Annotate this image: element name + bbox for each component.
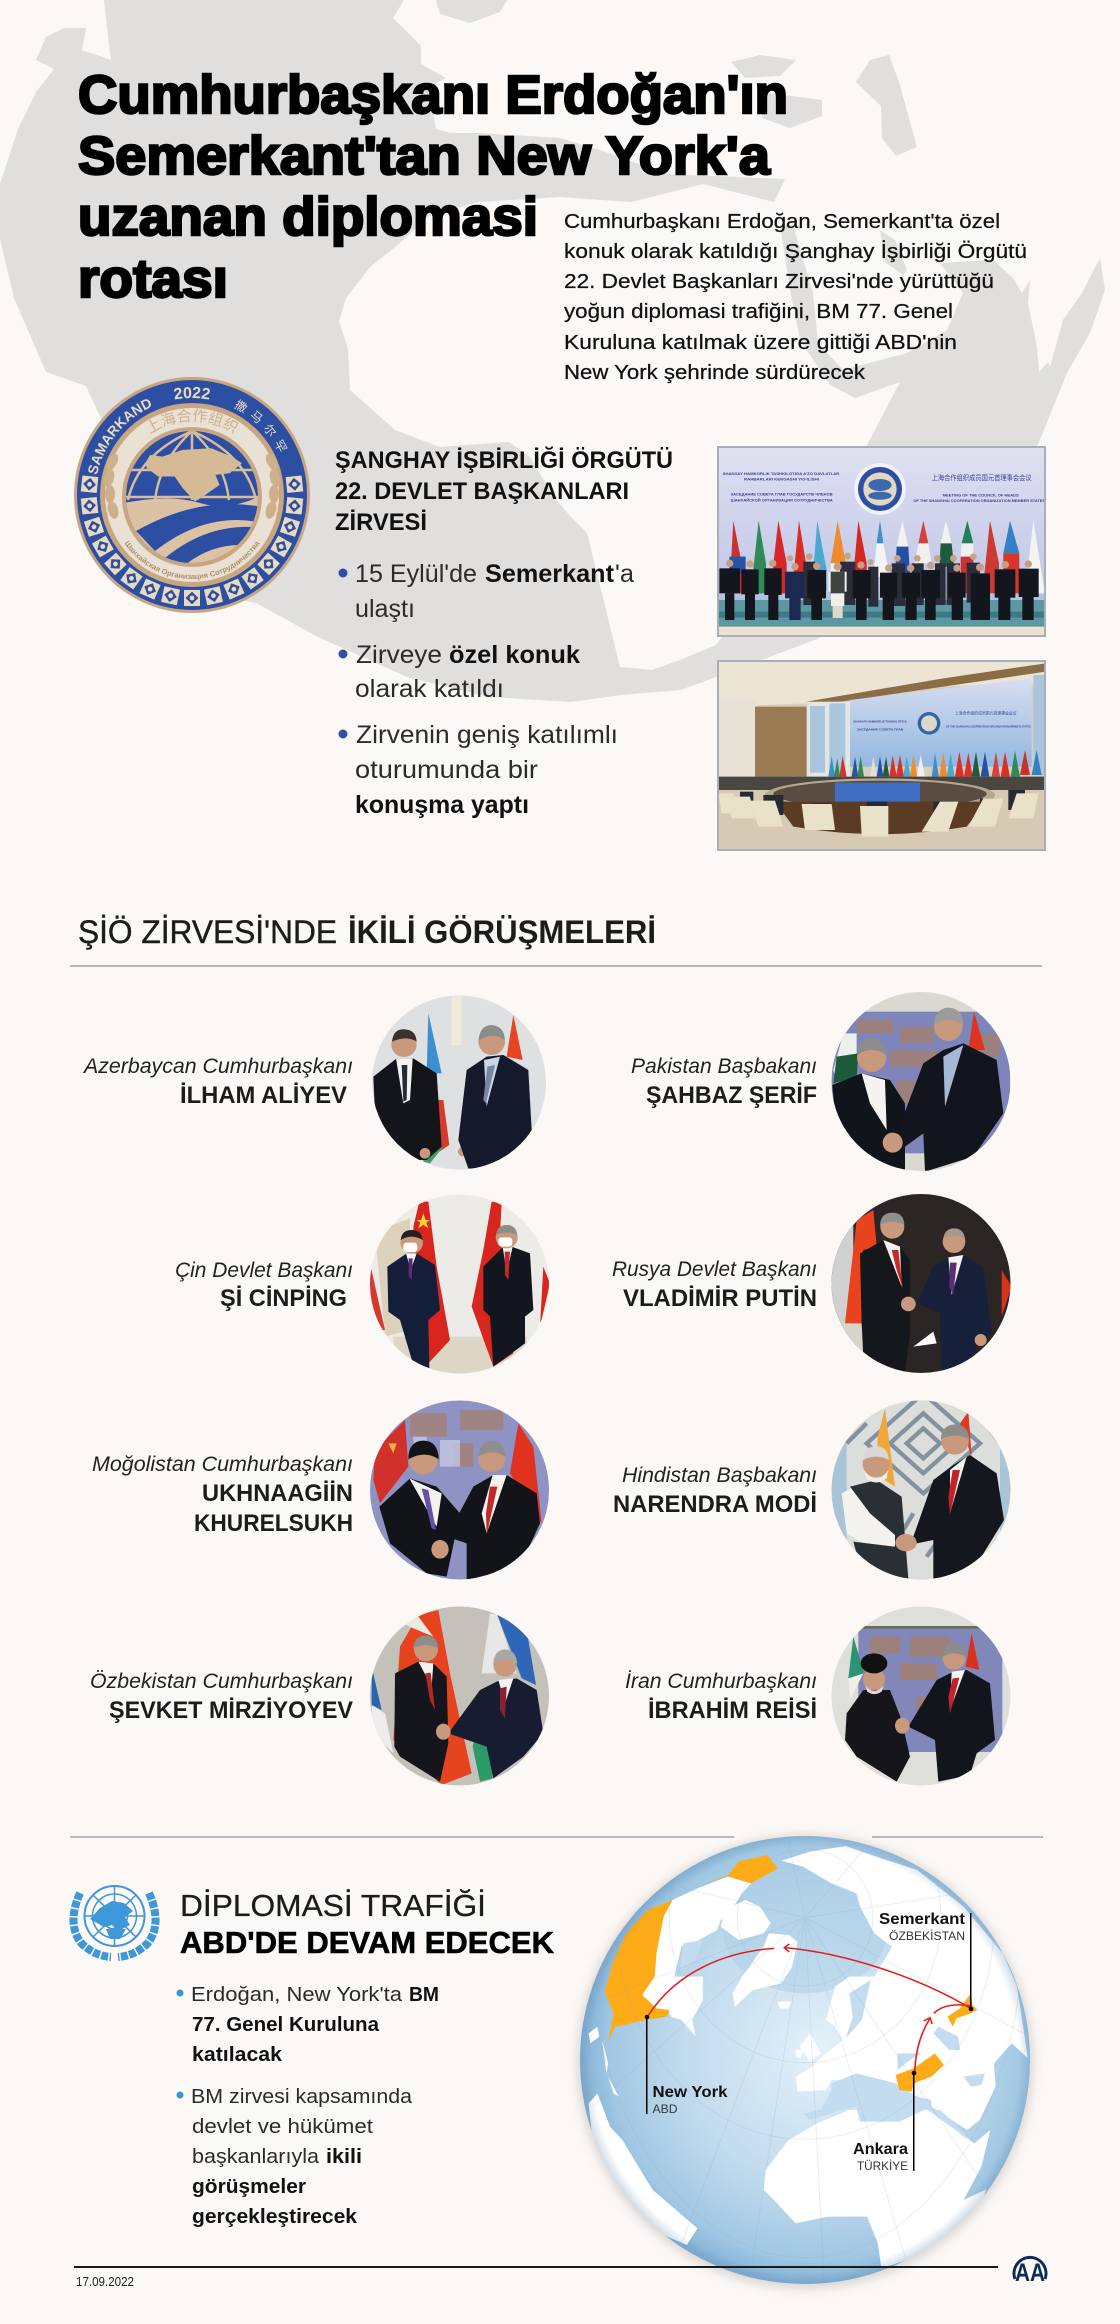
label: Sharif: Pakistan Başbakanı bbox=[631, 1055, 817, 1078]
intro paragraph bbox=[564, 211, 1027, 384]
globe map with route bbox=[574, 1832, 1036, 2292]
label: Semerkant: Semerkant bbox=[879, 1911, 966, 1928]
New York bullets: ikili bbox=[326, 2146, 362, 2168]
label: Khurelsukh: Moğolistan Cumhurbaşkanı bbox=[92, 1453, 353, 1476]
USA in orange bbox=[605, 1855, 778, 2042]
label: Khurelsukh bbox=[92, 1453, 353, 1537]
label: Ankara: Ankara bbox=[853, 2141, 908, 2158]
New York bullets: gerçekleştirecek bbox=[192, 2206, 358, 2228]
label: Sharif bbox=[631, 1055, 817, 1109]
SCO summit heading: 22. DEVLET BAŞKANLARI bbox=[335, 478, 629, 505]
label: Modi bbox=[613, 1464, 817, 1518]
Türkiye in orange bbox=[896, 2053, 944, 2092]
label: Khurelsukh: KHURELSUKH bbox=[194, 1510, 353, 1537]
photo: SCO summit hall bbox=[717, 660, 1046, 852]
label: Modi: Hindistan Başbakanı bbox=[622, 1464, 817, 1487]
photo: SCO leaders family photo: ШАНХАЙСКОЙ ОРГАНИЗАЦИИ СОТРУДНИЧЕСТВА bbox=[731, 498, 833, 502]
portrait: Putin and Erdoğan bbox=[830, 1192, 1012, 1375]
portrait: Raisi and Erdoğan bbox=[830, 1605, 1012, 1788]
photo: SCO leaders family photo: 上海合作组织成员国元首理事会会议 bbox=[932, 473, 1032, 482]
label: New York: New York bbox=[652, 2084, 728, 2101]
New York bullets: başkanlarıyla bbox=[192, 2146, 320, 2168]
label: Xi Jinping bbox=[175, 1259, 353, 1312]
label: Semerkant bbox=[879, 1911, 966, 1943]
SCO Samarkand 2022 seal: Шанхайская Организация Сотрудничества bbox=[124, 540, 260, 580]
label: Putin: VLADİMİR PUTİN bbox=[623, 1285, 817, 1312]
label: Sharif: ŞAHBAZ ŞERİF bbox=[646, 1082, 817, 1109]
title: Cumhurbaşkanı Erdoğan'ın bbox=[78, 65, 788, 125]
meeting: Raisi bbox=[625, 1605, 1012, 1788]
meeting: Modi bbox=[613, 1393, 1012, 1582]
intro paragraph: konuk olarak katıldığı Şanghay İşbirliği Örgütü bbox=[564, 240, 1027, 263]
SCO Samarkand 2022 seal: 上海合作组织 bbox=[149, 408, 238, 434]
New York bullets: BM zirvesi kapsamında bbox=[191, 2086, 413, 2108]
background world map in grey bbox=[0, 0, 1105, 702]
label: Xi Jinping: Çin Devlet Başkanı bbox=[175, 1259, 353, 1282]
intro paragraph: Kuruluna katılmak üzere gittiği ABD'nin bbox=[564, 332, 957, 354]
label: Mirziyoyev bbox=[90, 1670, 353, 1724]
route arrows bbox=[649, 1944, 971, 2073]
section heading: bilateral meetings bbox=[78, 914, 656, 950]
New York bullets: görüşmeler bbox=[192, 2176, 306, 2198]
graticule lines bbox=[592, 1845, 1024, 2266]
title bbox=[78, 65, 788, 309]
photo: SCO leaders family photo bbox=[717, 446, 1046, 637]
New York bullets: devlet ve hükümet bbox=[192, 2116, 373, 2138]
label: Aliyev bbox=[82, 1055, 353, 1109]
New York bullets bbox=[176, 1984, 439, 2228]
photo: SCO summit hall: SHANXAY HAMKORLIK TASHKILOTIGA bbox=[853, 720, 907, 724]
SCO summit bullets: konuşma yaptı bbox=[355, 791, 529, 819]
label: Xi Jinping: Şİ CİNPİNG bbox=[220, 1285, 347, 1312]
meeting: Sharif bbox=[631, 990, 1012, 1173]
label: Raisi: İBRAHİM REİSİ bbox=[648, 1697, 817, 1724]
label: New York bbox=[652, 2084, 728, 2116]
label: Modi: NARENDRA MODİ bbox=[613, 1491, 817, 1518]
intro paragraph: Cumhurbaşkanı Erdoğan, Semerkant'ta özel bbox=[564, 211, 1000, 233]
label: Raisi bbox=[625, 1670, 817, 1724]
heading: diplomacy traffic bbox=[180, 1888, 555, 1960]
label: Ankara bbox=[853, 2141, 908, 2173]
SCO summit bullets bbox=[338, 560, 634, 819]
photo: SCO leaders family photo: OF THE SHANGHAI COOPERATION ORGANIZATION MEMBER STATES bbox=[913, 499, 1046, 503]
portrait: Mirziyoyev and Erdoğan bbox=[368, 1605, 552, 1788]
portrait: Sharif and Erdoğan bbox=[830, 990, 1012, 1173]
label: Aliyev: İLHAM ALİYEV bbox=[180, 1082, 347, 1109]
photo: SCO leaders family photo: SHANXAY HAMKORLIK TASHKILOTIGA A'ZO DAVLATLAR bbox=[723, 472, 840, 476]
label: Ankara: TÜRKİYE bbox=[857, 2159, 908, 2173]
SCO summit heading: ŞANGHAY İŞBİRLİĞİ ÖRGÜTÜ bbox=[335, 446, 673, 474]
pointer lines and dots bbox=[645, 1913, 973, 2171]
label: Raisi: İran Cumhurbaşkanı bbox=[625, 1670, 817, 1693]
portrait: Aliyev and Erdoğan bbox=[370, 993, 550, 1170]
section heading: bilateral meetings: İKİLİ GÖRÜŞMELERİ bbox=[348, 914, 656, 950]
SCO summit bullets: oturumunda bir bbox=[355, 756, 538, 784]
title: uzanan diplomasi bbox=[78, 187, 538, 247]
icon: Anadolu Agency logo: AA bbox=[1015, 2259, 1045, 2287]
meeting: Aliyev bbox=[82, 993, 550, 1170]
meeting: Putin bbox=[612, 1192, 1012, 1375]
label: Putin bbox=[612, 1258, 817, 1312]
heading: diplomacy traffic: DİPLOMASİ TRAFİĞİ bbox=[180, 1888, 486, 1923]
SCO summit bullets: Zirvenin geniş katılımlı bbox=[356, 721, 618, 749]
photo: SCO summit hall: ЗАСЕДАНИЕ СОВЕТА ГЛАВ bbox=[857, 728, 904, 732]
section heading: bilateral meetings: ŞİÖ ZİRVESİ'NDE bbox=[78, 914, 337, 950]
intro paragraph: New York şehrinde sürdürecek bbox=[564, 362, 866, 384]
land masses bbox=[589, 1846, 1028, 2268]
Uzbekistan in orange bbox=[947, 1993, 977, 2027]
meeting: Mirziyoyev bbox=[90, 1605, 552, 1788]
inland seas bbox=[680, 1940, 985, 2142]
SCO summit bullets: özel konuk bbox=[449, 641, 580, 669]
label: Aliyev: Azerbaycan Cumhurbaşkanı bbox=[82, 1055, 353, 1078]
SCO Samarkand 2022 seal bbox=[74, 377, 310, 613]
label: Putin: Rusya Devlet Başkanı bbox=[612, 1258, 817, 1281]
New York bullets: Erdoğan, New York'ta bbox=[191, 1984, 403, 2006]
SCO summit bullets: Zirveye bbox=[356, 641, 442, 669]
title: Semerkant'tan New York'a bbox=[78, 126, 771, 186]
SCO summit bullets: Semerkant bbox=[485, 560, 615, 588]
label: Mirziyoyev: Özbekistan Cumhurbaşkanı bbox=[90, 1670, 353, 1693]
SCO Samarkand 2022 seal: 2022 bbox=[174, 386, 210, 400]
photo: SCO summit hall: OF THE SHANGHAI COOPERATION ORGANIZATION MEMBER STATES bbox=[946, 724, 1031, 728]
New York bullets: 77. Genel Kuruluna bbox=[192, 2014, 380, 2036]
SCO summit heading bbox=[335, 446, 673, 536]
SCO Samarkand 2022 seal: SAMARKAND bbox=[88, 399, 151, 474]
portrait: Modi and Erdoğan bbox=[830, 1393, 1012, 1582]
SCO summit bullets: ulaştı bbox=[355, 595, 415, 623]
meeting: Khurelsukh bbox=[92, 1398, 552, 1582]
label: Khurelsukh: UKHNAAGİİN bbox=[202, 1480, 353, 1507]
SCO summit bullets: 'a bbox=[615, 560, 634, 588]
SCO summit bullets: olarak katıldı bbox=[355, 675, 504, 703]
label: New York: ABD bbox=[652, 2102, 678, 2116]
label: Mirziyoyev: ŞEVKET MİRZİYOYEV bbox=[109, 1697, 353, 1724]
meeting: Xi Jinping bbox=[175, 1193, 552, 1375]
SCO summit bullets: 15 Eylül'de bbox=[355, 560, 477, 588]
SCO Samarkand 2022 seal: 撒马尔罕 bbox=[234, 399, 288, 452]
intro paragraph: yoğun diplomasi trafiğini, BM 77. Genel bbox=[564, 301, 953, 323]
title: rotası bbox=[78, 249, 228, 309]
label: Semerkant: ÖZBEKİSTAN bbox=[889, 1929, 965, 1943]
New York bullets: katılacak bbox=[192, 2044, 283, 2066]
photo: SCO summit hall: 上海合作组织成员国元首理事会会议 bbox=[955, 709, 1017, 715]
photo: SCO leaders family photo: RAHBARLARI KENGASHI YIG'ILISHI bbox=[744, 478, 819, 482]
New York bullets: BM bbox=[409, 1984, 439, 2006]
photo: SCO leaders family photo: ЗАСЕДАНИЕ СОВЕТА ГЛАВ ГОСУДАРСТВ-ЧЛЕНОВ bbox=[731, 493, 833, 497]
arctic ocean tint bbox=[723, 1898, 886, 1994]
icon: United Nations emblem bbox=[73, 1886, 156, 1957]
intro paragraph: 22. Devlet Başkanları Zirvesi'nde yürüttüğü bbox=[564, 271, 994, 293]
SCO summit heading: ZİRVESİ bbox=[335, 509, 427, 536]
portrait: Khurelsukh and Erdoğan bbox=[368, 1398, 552, 1582]
photo: SCO leaders family photo: MEETING OF THE COUNCIL OF HEADS bbox=[943, 494, 1019, 498]
heading: diplomacy traffic: ABD'DE DEVAM EDECEK bbox=[180, 1925, 555, 1960]
date: 17.09.2022 bbox=[76, 2275, 134, 2289]
portrait: Xi Jinping and Erdoğan bbox=[368, 1193, 552, 1375]
